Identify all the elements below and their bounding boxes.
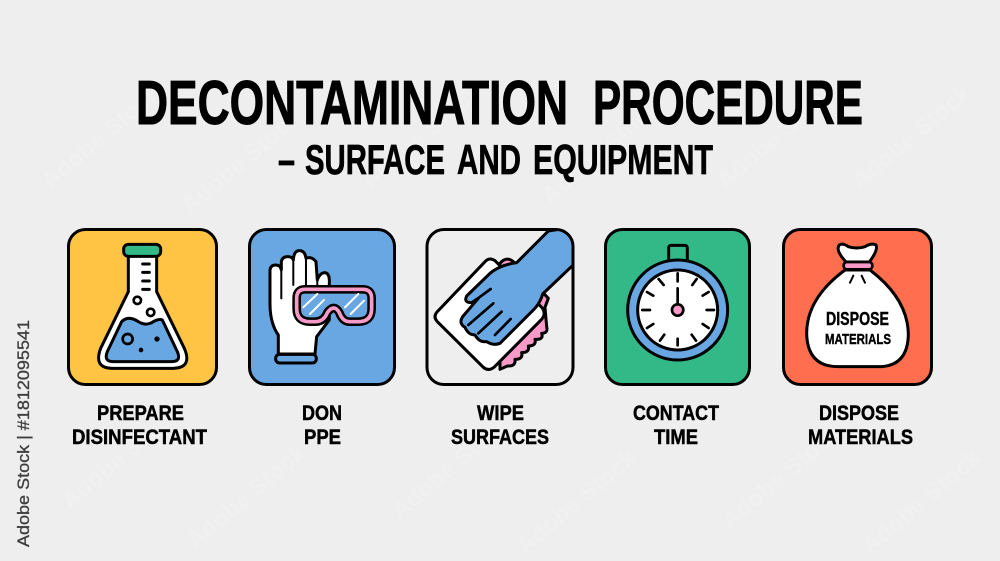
text: Adobe Stock	[717, 419, 847, 535]
panel: wipe surfaces	[427, 227, 577, 449]
text: Adobe Stock	[182, 439, 312, 555]
label: prepare disinfectant: DISINFECTANT	[72, 426, 207, 449]
label: dispose materials	[808, 402, 913, 449]
icon: stopwatch	[628, 245, 728, 360]
subtitle: AND	[457, 136, 521, 183]
label: contact time: TIME	[654, 426, 698, 449]
bag text: MATERIALS	[825, 331, 891, 348]
panel: prepare disinfectant	[68, 230, 216, 449]
subtitle: –	[278, 136, 295, 183]
label: contact time	[633, 402, 719, 449]
text: Adobe Stock	[857, 444, 987, 560]
stock id text: Adobe Stock | #1812095541	[14, 320, 33, 547]
label: don ppe	[302, 402, 342, 449]
subtitle	[278, 136, 713, 183]
icon: white wipe	[435, 259, 544, 369]
label: don ppe: PPE	[304, 426, 341, 449]
title: DECONTAMINATION	[136, 69, 568, 138]
label: wipe surfaces: WIPE	[477, 402, 524, 425]
text: Adobe Stock	[357, 79, 487, 195]
panel: don ppe	[250, 230, 394, 449]
text: Adobe Stock	[847, 79, 977, 195]
subtitle: EQUIPMENT	[533, 136, 713, 183]
icon: goggles	[297, 289, 372, 322]
bag text: DISPOSE	[826, 309, 889, 329]
text: Adobe Stock	[177, 104, 307, 220]
label: contact time: CONTACT	[633, 402, 719, 425]
icon: blue gloved hand	[461, 227, 577, 344]
text: Adobe Stock	[37, 79, 167, 195]
label: wipe surfaces: SURFACES	[451, 426, 549, 449]
title: PROCEDURE	[593, 69, 863, 138]
panel: dispose materials	[784, 230, 932, 449]
text: Adobe Stock	[712, 79, 842, 195]
bag text	[825, 309, 891, 348]
icon: pink cloth	[500, 259, 548, 369]
label: don ppe: DON	[302, 402, 342, 425]
icon: waste bag	[807, 244, 908, 367]
label: wipe surfaces	[451, 402, 549, 449]
label: dispose materials: MATERIALS	[808, 426, 913, 449]
label: dispose materials: DISPOSE	[819, 402, 899, 425]
subtitle: SURFACE	[305, 136, 445, 183]
text: Adobe Stock	[512, 444, 642, 560]
icon: flask	[99, 244, 187, 368]
label: prepare disinfectant: PREPARE	[97, 402, 184, 425]
text: Adobe Stock	[57, 399, 187, 515]
text: Adobe Stock	[387, 409, 517, 525]
icon: glove	[270, 251, 329, 363]
text: Adobe Stock	[537, 94, 667, 210]
label: prepare disinfectant	[72, 402, 207, 449]
panel: contact time	[606, 230, 750, 449]
